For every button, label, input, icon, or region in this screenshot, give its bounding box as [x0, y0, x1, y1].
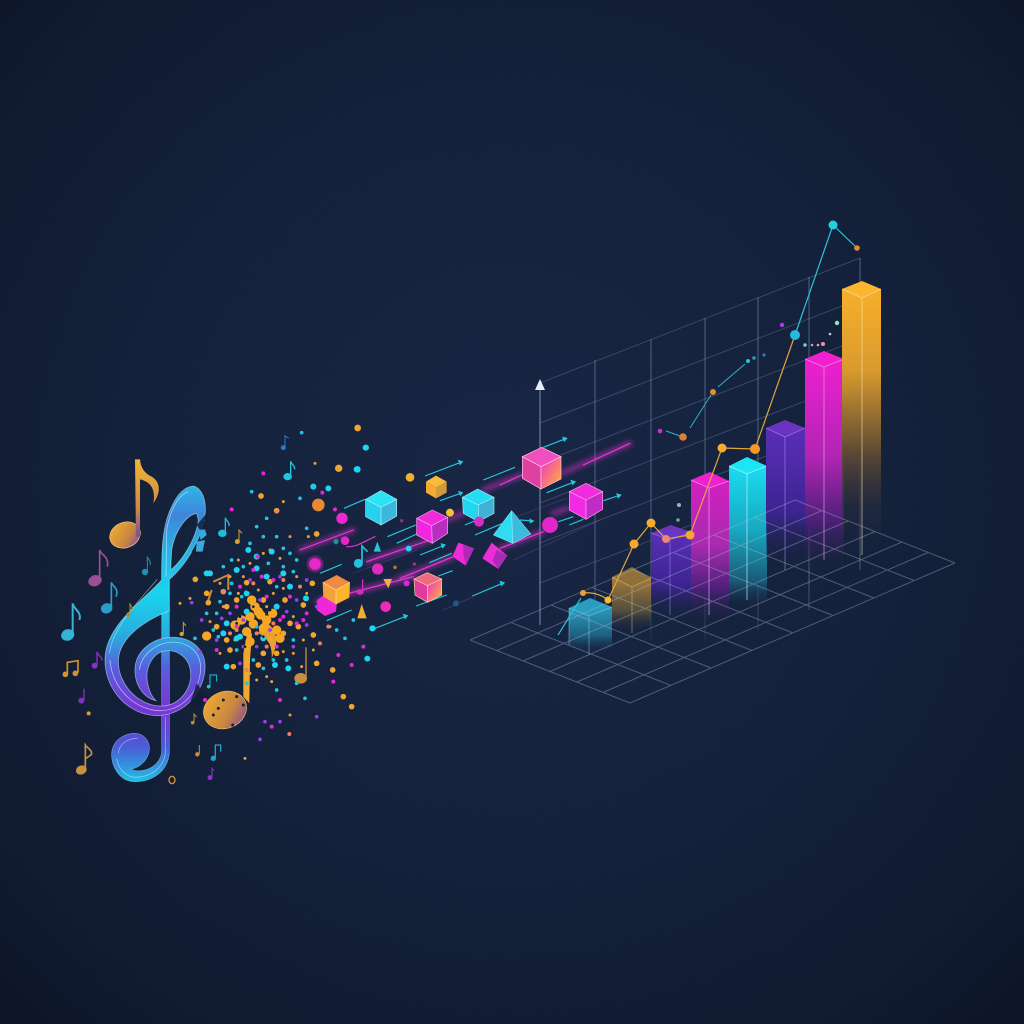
bar: magenta 4	[691, 472, 729, 625]
floor grid	[470, 500, 955, 703]
cube: magenta centre	[417, 510, 448, 543]
note: large gold	[106, 459, 159, 553]
y axis arrow	[535, 379, 545, 625]
small shards	[306, 425, 558, 631]
chart back wall grid	[540, 258, 860, 640]
secondary scattered line	[658, 321, 839, 522]
bar: cyan 1	[569, 598, 612, 655]
small floating notes left of clef	[61, 550, 150, 775]
cube: small amber	[426, 476, 447, 498]
cube: cyan left	[366, 491, 397, 525]
bar: cyan 5	[729, 457, 767, 610]
cyan motion arrows	[320, 437, 621, 628]
cube: magenta to gold large	[522, 447, 561, 489]
trend line with data points	[558, 220, 860, 635]
cube: cyan centre	[462, 489, 494, 522]
bar: purple 3	[651, 525, 691, 622]
data stream: streaks, arrows and cubes	[300, 425, 630, 631]
pyramid: cyan	[493, 511, 531, 543]
notes inside particle cloud	[169, 436, 306, 784]
bar: purple 6	[766, 420, 805, 570]
bar: magenta 7	[805, 351, 844, 575]
bar: amber 2	[612, 567, 651, 633]
tilted magenta cubes	[452, 543, 507, 569]
glowing magenta streaks	[300, 443, 630, 610]
cube: amber and magenta left	[317, 575, 350, 616]
broken note: head and stem	[198, 620, 276, 735]
cube: magenta right	[569, 483, 603, 519]
bar: amber 8	[842, 281, 881, 560]
cube: magenta amber lower	[414, 573, 442, 602]
particle cloud	[180, 428, 372, 758]
treble clef	[105, 486, 209, 782]
music side	[61, 428, 372, 784]
bar chart	[569, 281, 881, 655]
